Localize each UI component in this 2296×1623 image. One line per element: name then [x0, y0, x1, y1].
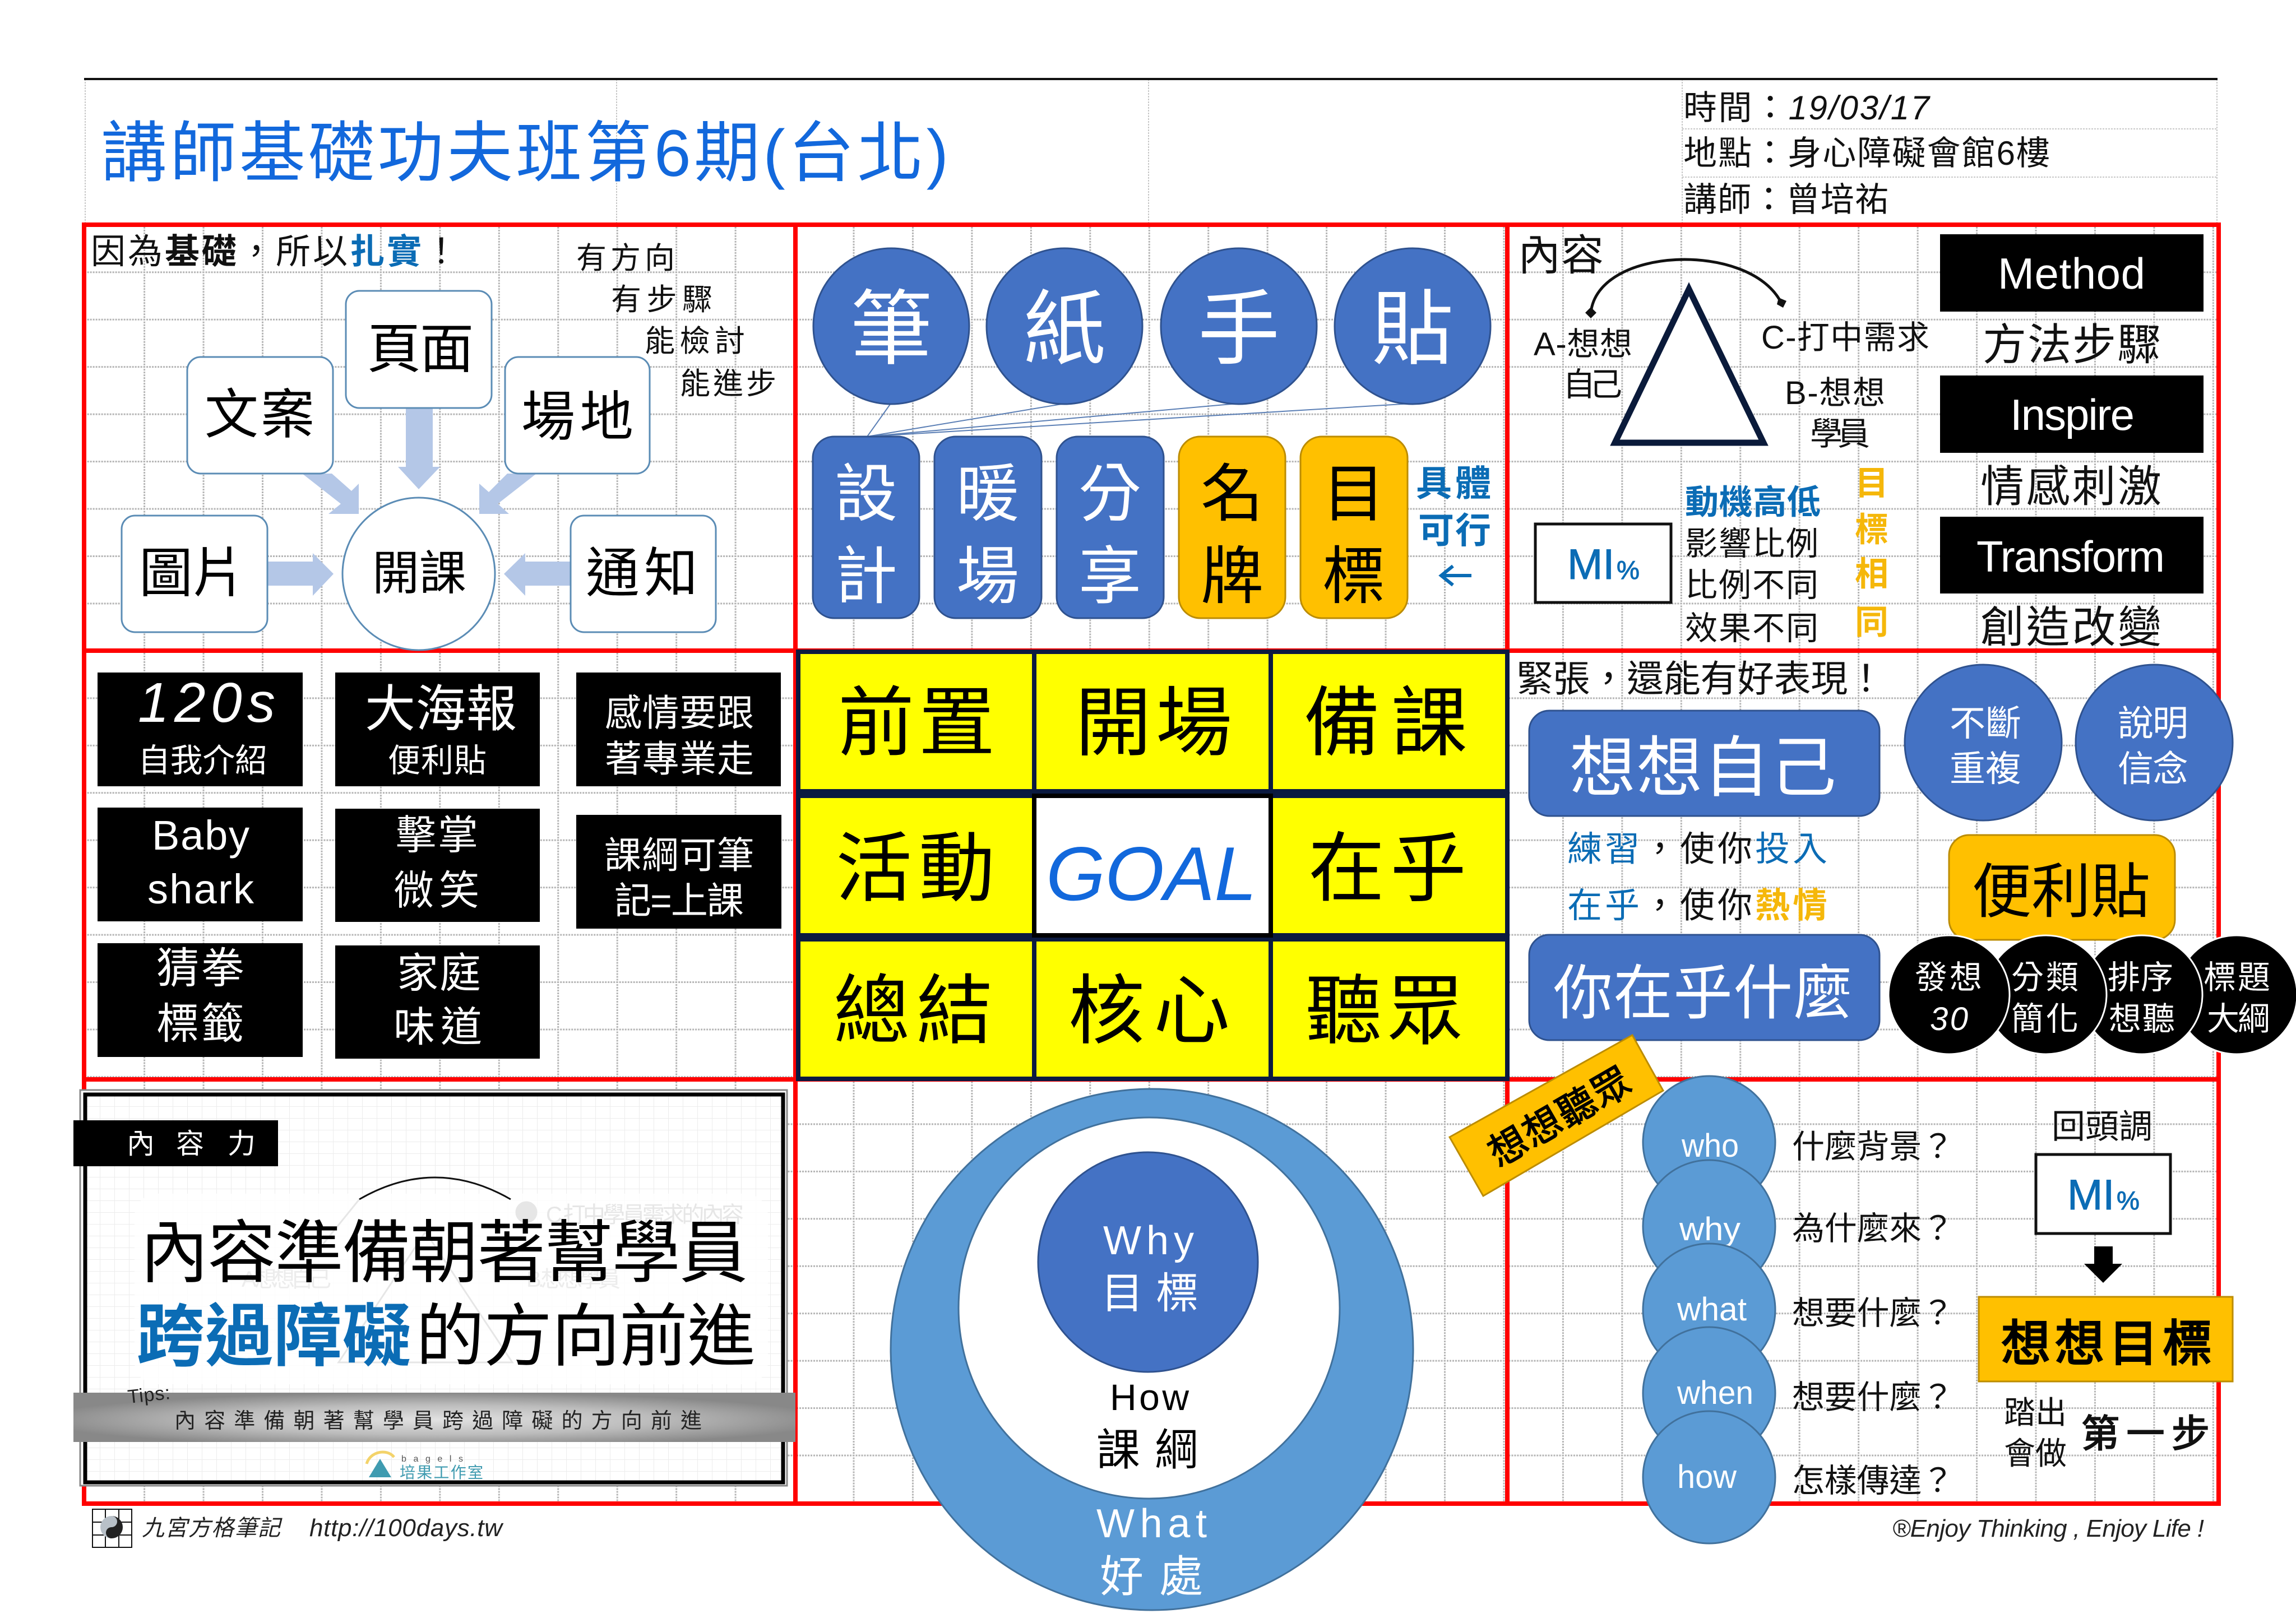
box: 設計 — [813, 437, 919, 618]
panel: nine-cell goal grid — [798, 652, 1507, 1079]
cell labels: 聽眾 — [1306, 968, 1464, 1054]
studio logo — [367, 1452, 483, 1481]
box: 分享: 享 — [1078, 541, 1141, 611]
circle: 不斷重複 — [1905, 665, 2062, 820]
box: 名牌: 名 — [1201, 459, 1263, 529]
black circles: 想聽 — [2109, 1001, 2175, 1037]
box: 頁面: 頁面 — [367, 319, 474, 379]
arrow: left — [1441, 566, 1471, 585]
circle: 筆: 筆 — [850, 284, 932, 375]
label: how: How — [1110, 1376, 1189, 1418]
tab label: 內 — [127, 1128, 155, 1160]
cell labels: 在乎 — [1308, 826, 1466, 911]
box: 設計: 計 — [835, 541, 897, 611]
card: 猜拳標籤: 猜拳 — [156, 945, 244, 993]
triangle labels: 自己 — [1563, 367, 1622, 403]
panel: opening a course — [91, 233, 776, 650]
label: why: Why — [1103, 1218, 1194, 1263]
motivation notes — [1685, 484, 1821, 647]
card: 大海報: 大海報 — [365, 681, 517, 738]
centre goal cell: GOAL — [1046, 831, 1257, 916]
black circles: 標題 — [2204, 959, 2270, 996]
text: 在乎: 在乎，使你熱情 — [1567, 887, 1830, 925]
box: 想想自己 — [1529, 711, 1880, 816]
triangle labels — [1534, 319, 1929, 452]
box: MI% — [2036, 1154, 2170, 1234]
black box: Transform — [1940, 517, 2204, 593]
card: 課綱可筆記=上課 — [576, 815, 781, 929]
black circles: 30 — [1930, 1001, 1968, 1037]
arc with ends — [1585, 259, 1786, 318]
card: Baby shark: Baby — [152, 812, 249, 859]
circle: 開課 — [342, 498, 495, 650]
text: first step: 會做 — [2004, 1436, 2067, 1471]
motivation notes: 動機高低 — [1685, 484, 1821, 521]
box: 你在乎什麼: 你在乎什麼 — [1553, 961, 1853, 1027]
black circles — [1888, 935, 2296, 1054]
middle circle: how — [959, 1117, 1340, 1499]
card: 猜拳標籤 — [98, 943, 303, 1057]
label: what: 好處 — [1100, 1552, 1203, 1601]
circle: 開課: 開課 — [372, 547, 466, 600]
circle: who — [1643, 1076, 1775, 1208]
vertical note: 目標相同: 相 — [1855, 555, 1888, 593]
text: 練習: 練習，使你投入 — [1567, 830, 1830, 869]
box: 便利貼: 便利貼 — [1972, 859, 2150, 925]
footer brand — [92, 1509, 504, 1547]
note: 具體可行: 可行 — [1418, 511, 1491, 551]
lecturer: 講師：曾培祐 — [1683, 181, 1888, 219]
box: 想想目標 — [1979, 1297, 2233, 1381]
label: how — [1096, 1376, 1198, 1474]
box: 文案: 文案 — [205, 385, 314, 445]
url: http://100days.tw — [309, 1514, 504, 1542]
questions — [1792, 1129, 1954, 1499]
triangle labels: C-打中需求 — [1761, 319, 1929, 356]
label: what — [1096, 1501, 1207, 1601]
black box: Transform: Transform — [1976, 532, 2165, 581]
black box: Method — [1940, 234, 2204, 312]
circle: when: when — [1677, 1375, 1753, 1411]
card: Baby shark — [98, 808, 303, 921]
main statement line 2: 跨過障礙 — [136, 1299, 411, 1375]
circle: 貼: 貼 — [1372, 284, 1453, 375]
box: MI%: % — [2117, 1186, 2140, 1215]
card: 家庭味道 — [335, 945, 540, 1059]
tab label — [73, 1120, 278, 1166]
card: 擊掌微笑 — [335, 809, 540, 922]
circle: 說明信念: 信念 — [2118, 749, 2188, 789]
questions: 想要什麼？ — [1792, 1295, 1954, 1332]
triangle labels: 學員 — [1810, 416, 1870, 452]
arrows to centre — [267, 408, 571, 596]
card: 感情要跟著專業走 — [576, 673, 781, 786]
date: 時間：19/03/17 — [1683, 89, 1931, 127]
red frame grid — [84, 225, 2219, 1504]
motivation notes: 比例不同 — [1685, 567, 1818, 604]
heading: 內容 — [1518, 232, 1604, 280]
footer slogan: ®Enjoy Thinking , Enjoy Life ! — [1892, 1515, 2204, 1542]
black box: Inspire: Inspire — [2010, 390, 2135, 439]
centre goal cell — [1034, 796, 1271, 935]
text: 情感刺激: 情感刺激 — [1980, 462, 2161, 511]
box: 名牌 — [1179, 437, 1285, 618]
black circles: 排序 — [2108, 959, 2173, 996]
circle: what: what — [1677, 1291, 1747, 1328]
card: 擊掌微笑: 微笑 — [394, 869, 479, 913]
box: 頁面 — [346, 291, 492, 408]
yellow cells — [798, 652, 1507, 1079]
card: 120s: 自我介紹 — [138, 743, 267, 779]
panel: handling nerves — [1516, 658, 2296, 1054]
note: 具體可行 — [1416, 463, 1491, 551]
cell labels: 前置 — [838, 680, 995, 766]
box: MI%: MI — [2067, 1171, 2114, 1219]
circle: how — [1643, 1411, 1775, 1543]
icon: nine-grid logo — [92, 1509, 132, 1547]
box: 設計: 設 — [835, 459, 897, 529]
box: 場地: 場地 — [521, 387, 633, 447]
label: what: What — [1096, 1501, 1207, 1546]
panel: slide content power — [73, 1090, 795, 1486]
box: MI%: MI — [1567, 541, 1614, 588]
card: 擊掌微笑: 擊掌 — [396, 813, 478, 858]
panel: think about audience — [1450, 1035, 2233, 1543]
inner circle: why — [1038, 1152, 1258, 1372]
cell labels: 備課 — [1304, 680, 1468, 766]
circle: what — [1643, 1244, 1775, 1376]
watermark: C.打中學員需求的內容 — [546, 1203, 744, 1227]
circle: 紙 — [987, 248, 1142, 404]
text: 回頭調: 回頭調 — [2052, 1108, 2152, 1146]
vertical note: 目標相同: 標 — [1855, 511, 1888, 549]
panel: black activity cards — [98, 671, 781, 1059]
box: 分享 — [1057, 437, 1164, 618]
tab label: 力 — [228, 1128, 256, 1160]
box: MI%: % — [1617, 555, 1640, 585]
circle: 不斷重複: 不斷 — [1950, 703, 2021, 744]
panel: tools and items — [813, 248, 1491, 618]
vertical note: 目標相同: 同 — [1855, 604, 1888, 641]
circle: when — [1643, 1327, 1775, 1459]
staircase notes: 有方向 — [576, 242, 675, 275]
title: 講師基礎功夫班第6期(台北) — [101, 117, 948, 191]
card: 感情要跟著專業走: 感情要跟 — [605, 692, 754, 734]
note: 具體可行: 具體 — [1416, 463, 1491, 504]
box: 想想自己: 想想自己 — [1570, 731, 1836, 805]
vertical note: 目標相同: 目 — [1855, 465, 1888, 502]
motivation notes: 效果不同 — [1685, 610, 1818, 647]
panel: golden circle — [891, 1089, 1413, 1610]
text: first step: 第一步 — [2081, 1413, 2210, 1455]
watermark: A.想想自己 — [242, 1267, 331, 1292]
panel: content triangle — [1518, 232, 2204, 652]
box: 目標: 目 — [1322, 459, 1385, 529]
label: how: 課綱 — [1096, 1425, 1198, 1474]
cell labels — [834, 680, 1468, 1054]
cell labels: 開場 — [1075, 680, 1232, 766]
box: 便利貼 — [1949, 835, 2175, 940]
studio logo: bagels — [401, 1454, 463, 1464]
staircase notes: 能進步 — [680, 367, 776, 401]
cell labels: 活動 — [836, 826, 995, 911]
banner: 想想聽眾 — [1450, 1035, 1663, 1196]
box: 暖場 — [934, 437, 1041, 618]
box: 暖場: 場 — [956, 541, 1019, 611]
box: MI% — [1535, 524, 1671, 602]
box: 目標 — [1300, 437, 1408, 618]
questions: 什麼背景？ — [1792, 1129, 1954, 1165]
box: 圖片: 圖片 — [139, 544, 246, 604]
vertical note: 目標相同 — [1855, 465, 1888, 641]
black circles: 簡化 — [2011, 1001, 2079, 1037]
staircase notes: 有步驟 — [611, 283, 712, 317]
black circles: 分類 — [2011, 959, 2079, 996]
slide frame — [80, 1090, 787, 1486]
motivation notes: 影響比例 — [1685, 526, 1818, 562]
circle: 說明信念: 說明 — [2118, 703, 2188, 744]
main statement line 1: 內容準備朝著幫學員 — [140, 1215, 748, 1291]
label: why — [1101, 1218, 1198, 1318]
arc — [359, 1177, 511, 1199]
tips band: 內容準備朝著幫學員跨過障礙的方向前進 — [174, 1409, 702, 1433]
box: 圖片 — [122, 516, 267, 632]
box: 你在乎什麼 — [1529, 935, 1880, 1040]
black circles: 大綱 — [2207, 1001, 2270, 1037]
circle: 紙: 紙 — [1024, 284, 1105, 375]
questions: 為什麼來？ — [1792, 1211, 1954, 1247]
staircase notes — [576, 242, 776, 401]
black box: Method: Method — [1998, 249, 2145, 298]
circle: 手 — [1161, 248, 1317, 404]
arrow: down — [2084, 1246, 2122, 1283]
circle: 貼 — [1335, 248, 1490, 404]
box: 想想目標: 想想目標 — [2001, 1316, 2212, 1371]
card: 感情要跟著專業走: 著專業走 — [605, 738, 754, 780]
questions: 怎樣傳達？ — [1792, 1463, 1954, 1499]
card: 家庭味道: 味道 — [394, 1004, 482, 1050]
circle: how: how — [1677, 1459, 1737, 1495]
circle: 筆 — [813, 248, 969, 404]
card: 120s — [98, 671, 303, 786]
box: 文案 — [187, 357, 333, 474]
connector lines — [867, 404, 1412, 437]
card: 大海報: 便利貼 — [388, 743, 487, 779]
box: 分享: 分 — [1078, 459, 1141, 529]
brand name: 九宮方格筆記 — [142, 1516, 283, 1541]
banner: 想想聽眾: 想想聽眾 — [1481, 1060, 1638, 1175]
text: first step: 踏出 — [2004, 1395, 2067, 1430]
text: first step — [2004, 1395, 2210, 1471]
box: 暖場: 暖 — [956, 459, 1019, 529]
label: why: 目標 — [1101, 1270, 1198, 1318]
card: 課綱可筆記=上課: 記=上課 — [614, 880, 744, 921]
triangle labels: A-想想 — [1534, 326, 1632, 363]
card: 120s: 120s — [138, 671, 275, 734]
triangle labels: B-想想 — [1785, 375, 1885, 411]
box: 目標: 標 — [1322, 541, 1385, 611]
triangle — [1615, 289, 1763, 443]
watermark: B.想想學員 — [526, 1267, 621, 1292]
heading: 因為基礎，所以扎實！ — [91, 233, 461, 271]
event info — [1683, 89, 2050, 219]
box: 場地 — [505, 357, 650, 474]
text: 創造改變: 創造改變 — [1980, 602, 2161, 652]
black box: Inspire — [1940, 375, 2204, 453]
studio logo: 培果工作室 — [400, 1464, 483, 1481]
main statement line 2 — [136, 1299, 756, 1375]
tips band — [73, 1382, 795, 1442]
circle: why: why — [1679, 1211, 1740, 1248]
heading: 緊張，還能有好表現！ — [1516, 658, 1885, 699]
cell labels: 核心 — [1068, 968, 1230, 1054]
card: 家庭味道: 家庭 — [397, 950, 481, 996]
card: 猜拳標籤: 標籤 — [156, 1000, 244, 1048]
circle: who: who — [1681, 1128, 1739, 1164]
circle: 手: 手 — [1198, 284, 1280, 375]
outer circle: what — [891, 1089, 1413, 1610]
watermark — [242, 1199, 744, 1362]
box: 通知 — [571, 516, 716, 632]
circle: why — [1643, 1160, 1775, 1292]
circle: 說明信念 — [2076, 665, 2233, 820]
circle: 不斷重複: 重複 — [1950, 749, 2021, 789]
text: 方法步驟: 方法步驟 — [1983, 320, 2161, 369]
box: 通知: 通知 — [586, 544, 698, 604]
location: 地點：身心障礙會館6樓 — [1683, 135, 2050, 172]
tab label: 容 — [176, 1128, 204, 1160]
card: 大海報 — [335, 673, 540, 786]
questions: 想要什麼？ — [1792, 1379, 1954, 1416]
staircase notes: 能檢討 — [645, 324, 745, 358]
tips band: Tips: — [127, 1382, 171, 1408]
card: 課綱可筆記=上課: 課綱可筆 — [604, 834, 754, 876]
main statement line 2: 的方向前進 — [416, 1299, 756, 1375]
cell labels: 總結 — [834, 968, 993, 1054]
card: Baby shark: shark — [147, 866, 254, 912]
box: 名牌: 牌 — [1201, 541, 1263, 611]
black circles: 發想 — [1915, 959, 1982, 996]
